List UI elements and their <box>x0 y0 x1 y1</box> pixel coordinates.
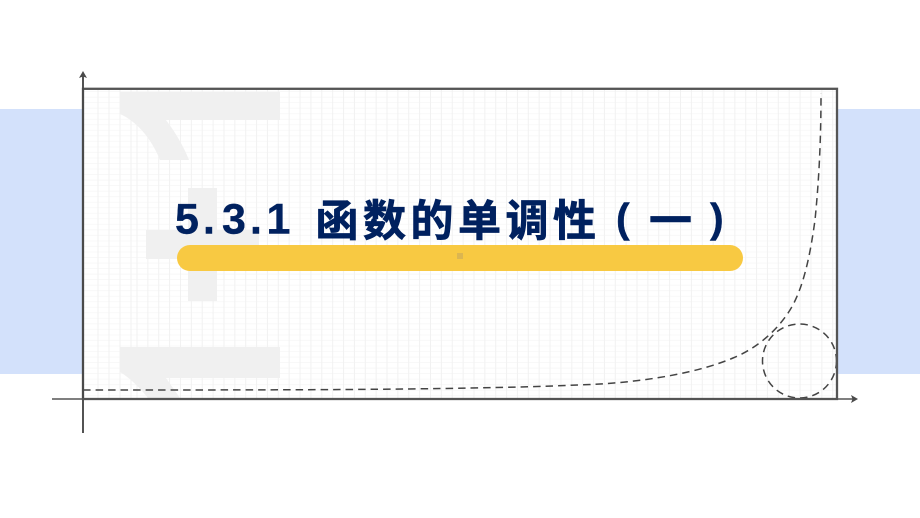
title <box>175 195 724 246</box>
blue background band <box>0 109 920 374</box>
title: ( <box>616 195 630 241</box>
y axis with arrow <box>79 71 87 433</box>
title: ) <box>710 195 724 241</box>
title: 一 <box>649 198 692 246</box>
graph paper panel <box>83 89 837 399</box>
panel frame <box>83 89 837 399</box>
watermark numeral shapes <box>120 92 280 398</box>
dashed curve <box>83 93 821 390</box>
x axis with arrow <box>52 395 858 403</box>
dashed circle <box>762 324 836 398</box>
title: 函数的单调性 <box>316 198 600 246</box>
yellow title bar <box>177 245 743 271</box>
title: 5.3.1 <box>175 196 290 244</box>
